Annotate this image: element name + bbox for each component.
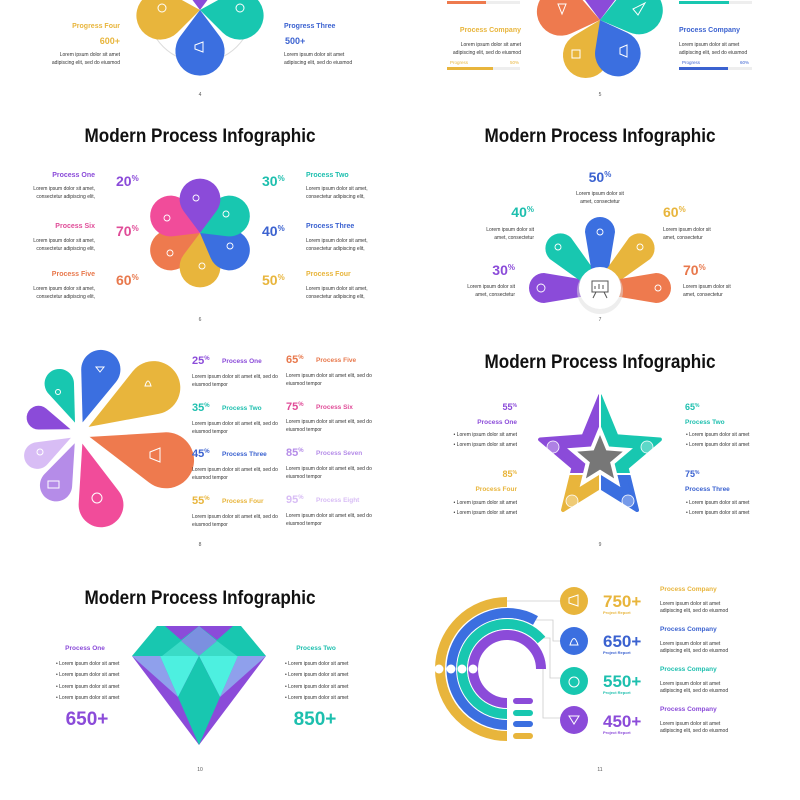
list column 2: eiusmod tempor xyxy=(286,427,322,433)
left text xyxy=(454,402,518,516)
left percentages: % xyxy=(132,224,139,233)
descriptions: Lorem ipsum dolor sit amet xyxy=(660,681,721,687)
descriptions: adipiscing elit, sed do eiusmod xyxy=(660,688,728,694)
list column 1: % xyxy=(204,496,210,502)
text block left: Lorem ipsum dolor sit amet xyxy=(461,42,522,48)
text: progress three: 500+ xyxy=(285,36,305,46)
descriptions: Process Company xyxy=(660,706,717,713)
list column 1: Process Four xyxy=(222,498,264,505)
list column 1: 35 xyxy=(192,402,204,414)
petal: teal xyxy=(594,0,668,43)
stats xyxy=(603,592,641,735)
percentages with text: 40 xyxy=(511,204,527,220)
right text xyxy=(285,645,349,730)
percentages with text: Lorem ipsum dolor sit xyxy=(486,227,535,233)
list column 1: Lorem ipsum dolor sit amet elit, sed do xyxy=(192,421,278,427)
left text: • Lorem ipsum dolor sit amet xyxy=(56,684,120,690)
left text: • Lorem ipsum dolor sit amet xyxy=(454,510,518,516)
right text: Process Two xyxy=(296,645,336,652)
percentages with text: % xyxy=(527,205,534,214)
text: progress three: adipiscing elit, sed do eiusmod xyxy=(284,60,352,66)
star chart xyxy=(540,396,660,510)
list column 1: % xyxy=(204,356,210,362)
text: progress three xyxy=(284,23,352,66)
left percentages: % xyxy=(132,273,139,282)
left percentages: 60 xyxy=(116,272,132,288)
title: Modern Process Infographic xyxy=(484,126,716,147)
list column 2: Process Eight xyxy=(316,497,360,504)
text block left: Progress xyxy=(450,60,469,65)
left text: • Lorem ipsum dolor sit amet xyxy=(56,661,120,667)
right text: % xyxy=(695,470,700,476)
list column 2 xyxy=(286,354,372,527)
title: Modern Process Infographic xyxy=(84,588,316,609)
fan chart xyxy=(529,217,671,314)
flower chart xyxy=(143,179,257,287)
left labels: Lorem ipsum dolor sit amet, xyxy=(33,286,95,292)
stats: Project Report xyxy=(603,650,631,655)
text block right xyxy=(679,27,752,70)
percentages with text: amet, consectetur xyxy=(494,235,534,241)
percentages with text: Lorem ipsum dolor sit xyxy=(683,284,731,290)
text: progress four: 600+ xyxy=(100,36,120,46)
right text: Process Three xyxy=(685,486,730,493)
title: Modern Process Infographic xyxy=(484,352,716,373)
slide 10: diamond: 10 xyxy=(197,767,203,773)
descriptions: adipiscing elit, sed do eiusmod xyxy=(660,648,728,654)
list column 2: Lorem ipsum dolor sit amet elit, sed do xyxy=(286,466,372,472)
percentages with text: % xyxy=(679,205,686,214)
text block left: 50% xyxy=(510,60,519,65)
slide 4: petal progress xyxy=(52,0,352,98)
left text xyxy=(56,645,120,730)
right text: • Lorem ipsum dolor sit amet xyxy=(686,510,750,516)
text: progress three: Lorem ipsum dolor sit amet xyxy=(284,52,345,58)
right labels: consectetur adipiscing elit, xyxy=(306,194,365,200)
icon circles xyxy=(560,587,588,734)
text: progress four: Progress Four xyxy=(72,23,120,30)
right percentages: % xyxy=(278,273,285,282)
list column 2: 65 xyxy=(286,354,298,366)
list column 1: Lorem ipsum dolor sit amet elit, sed do xyxy=(192,374,278,380)
list column 2: eiusmod tempor xyxy=(286,381,322,387)
list column 1: 25 xyxy=(192,355,204,367)
left labels: Lorem ipsum dolor sit amet, xyxy=(33,238,95,244)
right percentages: 30 xyxy=(262,173,278,189)
slide 8: swirl petals xyxy=(19,345,372,548)
descriptions: Process Company xyxy=(660,586,717,593)
text block right: adipiscing elit, sed do eiusmod xyxy=(679,50,747,56)
stats: 750+ xyxy=(603,592,641,611)
percentages with text: amet, consectetur xyxy=(580,199,620,205)
list column 2: % xyxy=(298,402,304,408)
list column 2: 85 xyxy=(286,447,298,459)
slide 5: petal process company xyxy=(447,0,752,98)
right labels: Process Three xyxy=(306,223,354,230)
list column 2: % xyxy=(298,355,304,361)
right percentages: % xyxy=(278,174,285,183)
text block left: Process Company xyxy=(460,27,521,34)
left text: % xyxy=(513,403,518,409)
petal: purple xyxy=(177,0,223,10)
left text: Process Four xyxy=(475,486,517,493)
stats: Project Report xyxy=(603,730,631,735)
left text: 650+ xyxy=(66,709,108,730)
descriptions xyxy=(660,586,728,734)
icon: megaphone xyxy=(158,4,244,52)
text block right: Progress xyxy=(682,60,701,65)
right labels: Lorem ipsum dolor sit amet, xyxy=(306,286,368,292)
left labels: Process One xyxy=(52,172,95,179)
right text: 850+ xyxy=(294,709,336,730)
list column 1: Lorem ipsum dolor sit amet elit, sed do xyxy=(192,514,278,520)
list column 2: 95 xyxy=(286,494,298,506)
left text: 55 xyxy=(503,402,513,412)
right labels: consectetur adipiscing elit, xyxy=(306,294,365,300)
petal: orange xyxy=(532,0,605,43)
list column 1: 45 xyxy=(192,448,204,460)
list column 2: Lorem ipsum dolor sit amet elit, sed do xyxy=(286,513,372,519)
petal: teal xyxy=(197,0,267,43)
left labels: consectetur adipiscing elit, xyxy=(36,194,95,200)
right labels: Lorem ipsum dolor sit amet, xyxy=(306,186,368,192)
list column 1: eiusmod tempor xyxy=(192,382,228,388)
left labels: Process Six xyxy=(55,223,95,230)
percentages with text: % xyxy=(699,263,706,272)
right text: 65 xyxy=(685,402,695,412)
stats: 450+ xyxy=(603,712,641,731)
descriptions: Lorem ipsum dolor sit amet xyxy=(660,601,721,607)
right text: • Lorem ipsum dolor sit amet xyxy=(686,432,750,438)
text: progress four xyxy=(52,23,121,66)
progress bar top right xyxy=(679,1,752,4)
list column 1: Process One xyxy=(222,358,262,365)
stats: Project Report xyxy=(603,690,631,695)
right labels: Process Four xyxy=(306,271,351,278)
left labels: Lorem ipsum dolor sit amet, xyxy=(33,186,95,192)
list column 1: % xyxy=(204,449,210,455)
list column 2: % xyxy=(298,495,304,501)
slide 5: petal process company: 5 xyxy=(599,92,602,98)
right percentages: % xyxy=(278,224,285,233)
left percentages: 20 xyxy=(116,173,132,189)
right text xyxy=(685,402,750,516)
percentages with text: % xyxy=(508,263,515,272)
left text: Process One xyxy=(65,645,105,652)
list column 2: eiusmod tempor xyxy=(286,474,322,480)
left text: Process One xyxy=(477,419,517,426)
text block right: Process Company xyxy=(679,27,740,34)
right labels: Lorem ipsum dolor sit amet, xyxy=(306,238,368,244)
descriptions: Lorem ipsum dolor sit amet xyxy=(660,641,721,647)
text: progress three: Progress Three xyxy=(284,23,335,30)
left text: 85 xyxy=(503,469,513,479)
list column 1: Process Two xyxy=(222,405,262,412)
left labels xyxy=(33,172,95,300)
slide 6: six petal flower xyxy=(33,126,368,323)
arc chart xyxy=(434,601,560,739)
descriptions: adipiscing elit, sed do eiusmod xyxy=(660,728,728,734)
text: progress four: adipiscing elit, sed do eiusmod xyxy=(52,60,120,66)
list column 1: % xyxy=(204,403,210,409)
left text: • Lorem ipsum dolor sit amet xyxy=(56,695,120,701)
percentages with text: amet, consectetur xyxy=(475,292,515,298)
slide 4: petal progress: 4 xyxy=(199,92,202,98)
list column 2: Process Seven xyxy=(316,450,362,457)
right text: • Lorem ipsum dolor sit amet xyxy=(285,695,349,701)
swirl chart xyxy=(19,345,201,533)
left text: • Lorem ipsum dolor sit amet xyxy=(454,432,518,438)
slide 7: fan petals: 7 xyxy=(599,317,602,323)
list column 2: eiusmod tempor xyxy=(286,521,322,527)
diamond chart xyxy=(132,626,266,745)
right text: • Lorem ipsum dolor sit amet xyxy=(285,661,349,667)
left text: • Lorem ipsum dolor sit amet xyxy=(56,672,120,678)
stats: Project Report xyxy=(603,610,631,615)
slide 6: six petal flower: 6 xyxy=(199,317,202,323)
left text: • Lorem ipsum dolor sit amet xyxy=(454,442,518,448)
text: progress four: Lorem ipsum dolor sit amet xyxy=(60,52,121,58)
text block left xyxy=(447,27,522,70)
petal: yellow xyxy=(133,0,203,43)
left text: • Lorem ipsum dolor sit amet xyxy=(454,500,518,506)
descriptions: Process Company xyxy=(660,666,717,673)
list column 1: 55 xyxy=(192,495,204,507)
percentages with text: 60 xyxy=(663,204,679,220)
left percentages: % xyxy=(132,174,139,183)
percentages with text xyxy=(467,169,731,298)
percentages with text: Lorem ipsum dolor sit xyxy=(576,191,625,197)
list column 2: 75 xyxy=(286,401,298,413)
list column 1: eiusmod tempor xyxy=(192,475,228,481)
right text: 75 xyxy=(685,469,695,479)
right labels: Process Two xyxy=(306,172,349,179)
descriptions: adipiscing elit, sed do eiusmod xyxy=(660,608,728,614)
progress bar top left xyxy=(447,1,520,4)
percentages with text: 70 xyxy=(683,262,699,278)
left labels: consectetur adipiscing elit, xyxy=(36,246,95,252)
slide 7: fan petals xyxy=(467,126,731,323)
list column 1: eiusmod tempor xyxy=(192,522,228,528)
right text: • Lorem ipsum dolor sit amet xyxy=(686,500,750,506)
right labels: consectetur adipiscing elit, xyxy=(306,246,365,252)
text block left: adipiscing elit, sed do eiusmod xyxy=(453,50,521,56)
percentages with text: amet, consectetur xyxy=(683,292,723,298)
left text: % xyxy=(513,470,518,476)
list column 1: eiusmod tempor xyxy=(192,429,228,435)
list column 2: Process Six xyxy=(316,404,353,411)
left labels: consectetur adipiscing elit, xyxy=(36,294,95,300)
petal: yellow xyxy=(556,11,621,85)
right text: % xyxy=(695,403,700,409)
percentages with text: 50 xyxy=(589,169,604,185)
slide 9: star xyxy=(454,352,750,548)
descriptions: Process Company xyxy=(660,626,717,633)
right text: • Lorem ipsum dolor sit amet xyxy=(285,684,349,690)
right text: • Lorem ipsum dolor sit amet xyxy=(285,672,349,678)
petal: blue xyxy=(580,9,649,84)
slide 10: diamond xyxy=(56,588,349,773)
text block right: 60% xyxy=(740,60,749,65)
list column 1: Process Three xyxy=(222,451,267,458)
slide 8: swirl petals: 8 xyxy=(199,542,202,548)
right labels xyxy=(306,172,368,300)
left labels: Process Five xyxy=(52,271,95,278)
stats: 550+ xyxy=(603,672,641,691)
right percentages: 40 xyxy=(262,223,278,239)
right percentages xyxy=(262,173,285,288)
icons xyxy=(558,3,645,58)
right percentages: 50 xyxy=(262,272,278,288)
descriptions: Lorem ipsum dolor sit amet xyxy=(660,721,721,727)
percentages with text: amet, consectetur xyxy=(663,235,703,241)
slide 11: arcs xyxy=(434,586,728,773)
percentages with text: Lorem ipsum dolor sit xyxy=(467,284,516,290)
list column 2: Process Five xyxy=(316,357,356,364)
stats: 650+ xyxy=(603,632,641,651)
text block right: Lorem ipsum dolor sit amet xyxy=(679,42,740,48)
list column 2: Lorem ipsum dolor sit amet elit, sed do xyxy=(286,373,372,379)
percentages with text: % xyxy=(604,170,611,179)
list column 2: % xyxy=(298,448,304,454)
percentages with text: 30 xyxy=(492,262,508,278)
petal: blue xyxy=(175,10,225,76)
slide 9: star: 9 xyxy=(599,542,602,548)
right text: • Lorem ipsum dolor sit amet xyxy=(686,442,750,448)
left percentages xyxy=(116,173,139,288)
list column 1 xyxy=(192,355,278,528)
list column 1: Lorem ipsum dolor sit amet elit, sed do xyxy=(192,467,278,473)
title: Modern Process Infographic xyxy=(84,126,316,147)
list column 2: Lorem ipsum dolor sit amet elit, sed do xyxy=(286,419,372,425)
petal: purple xyxy=(578,0,622,20)
right text: Process Two xyxy=(685,419,725,426)
slide 11: arcs: 11 xyxy=(597,767,603,773)
percentages with text: Lorem ipsum dolor sit xyxy=(663,227,711,233)
left percentages: 70 xyxy=(116,223,132,239)
